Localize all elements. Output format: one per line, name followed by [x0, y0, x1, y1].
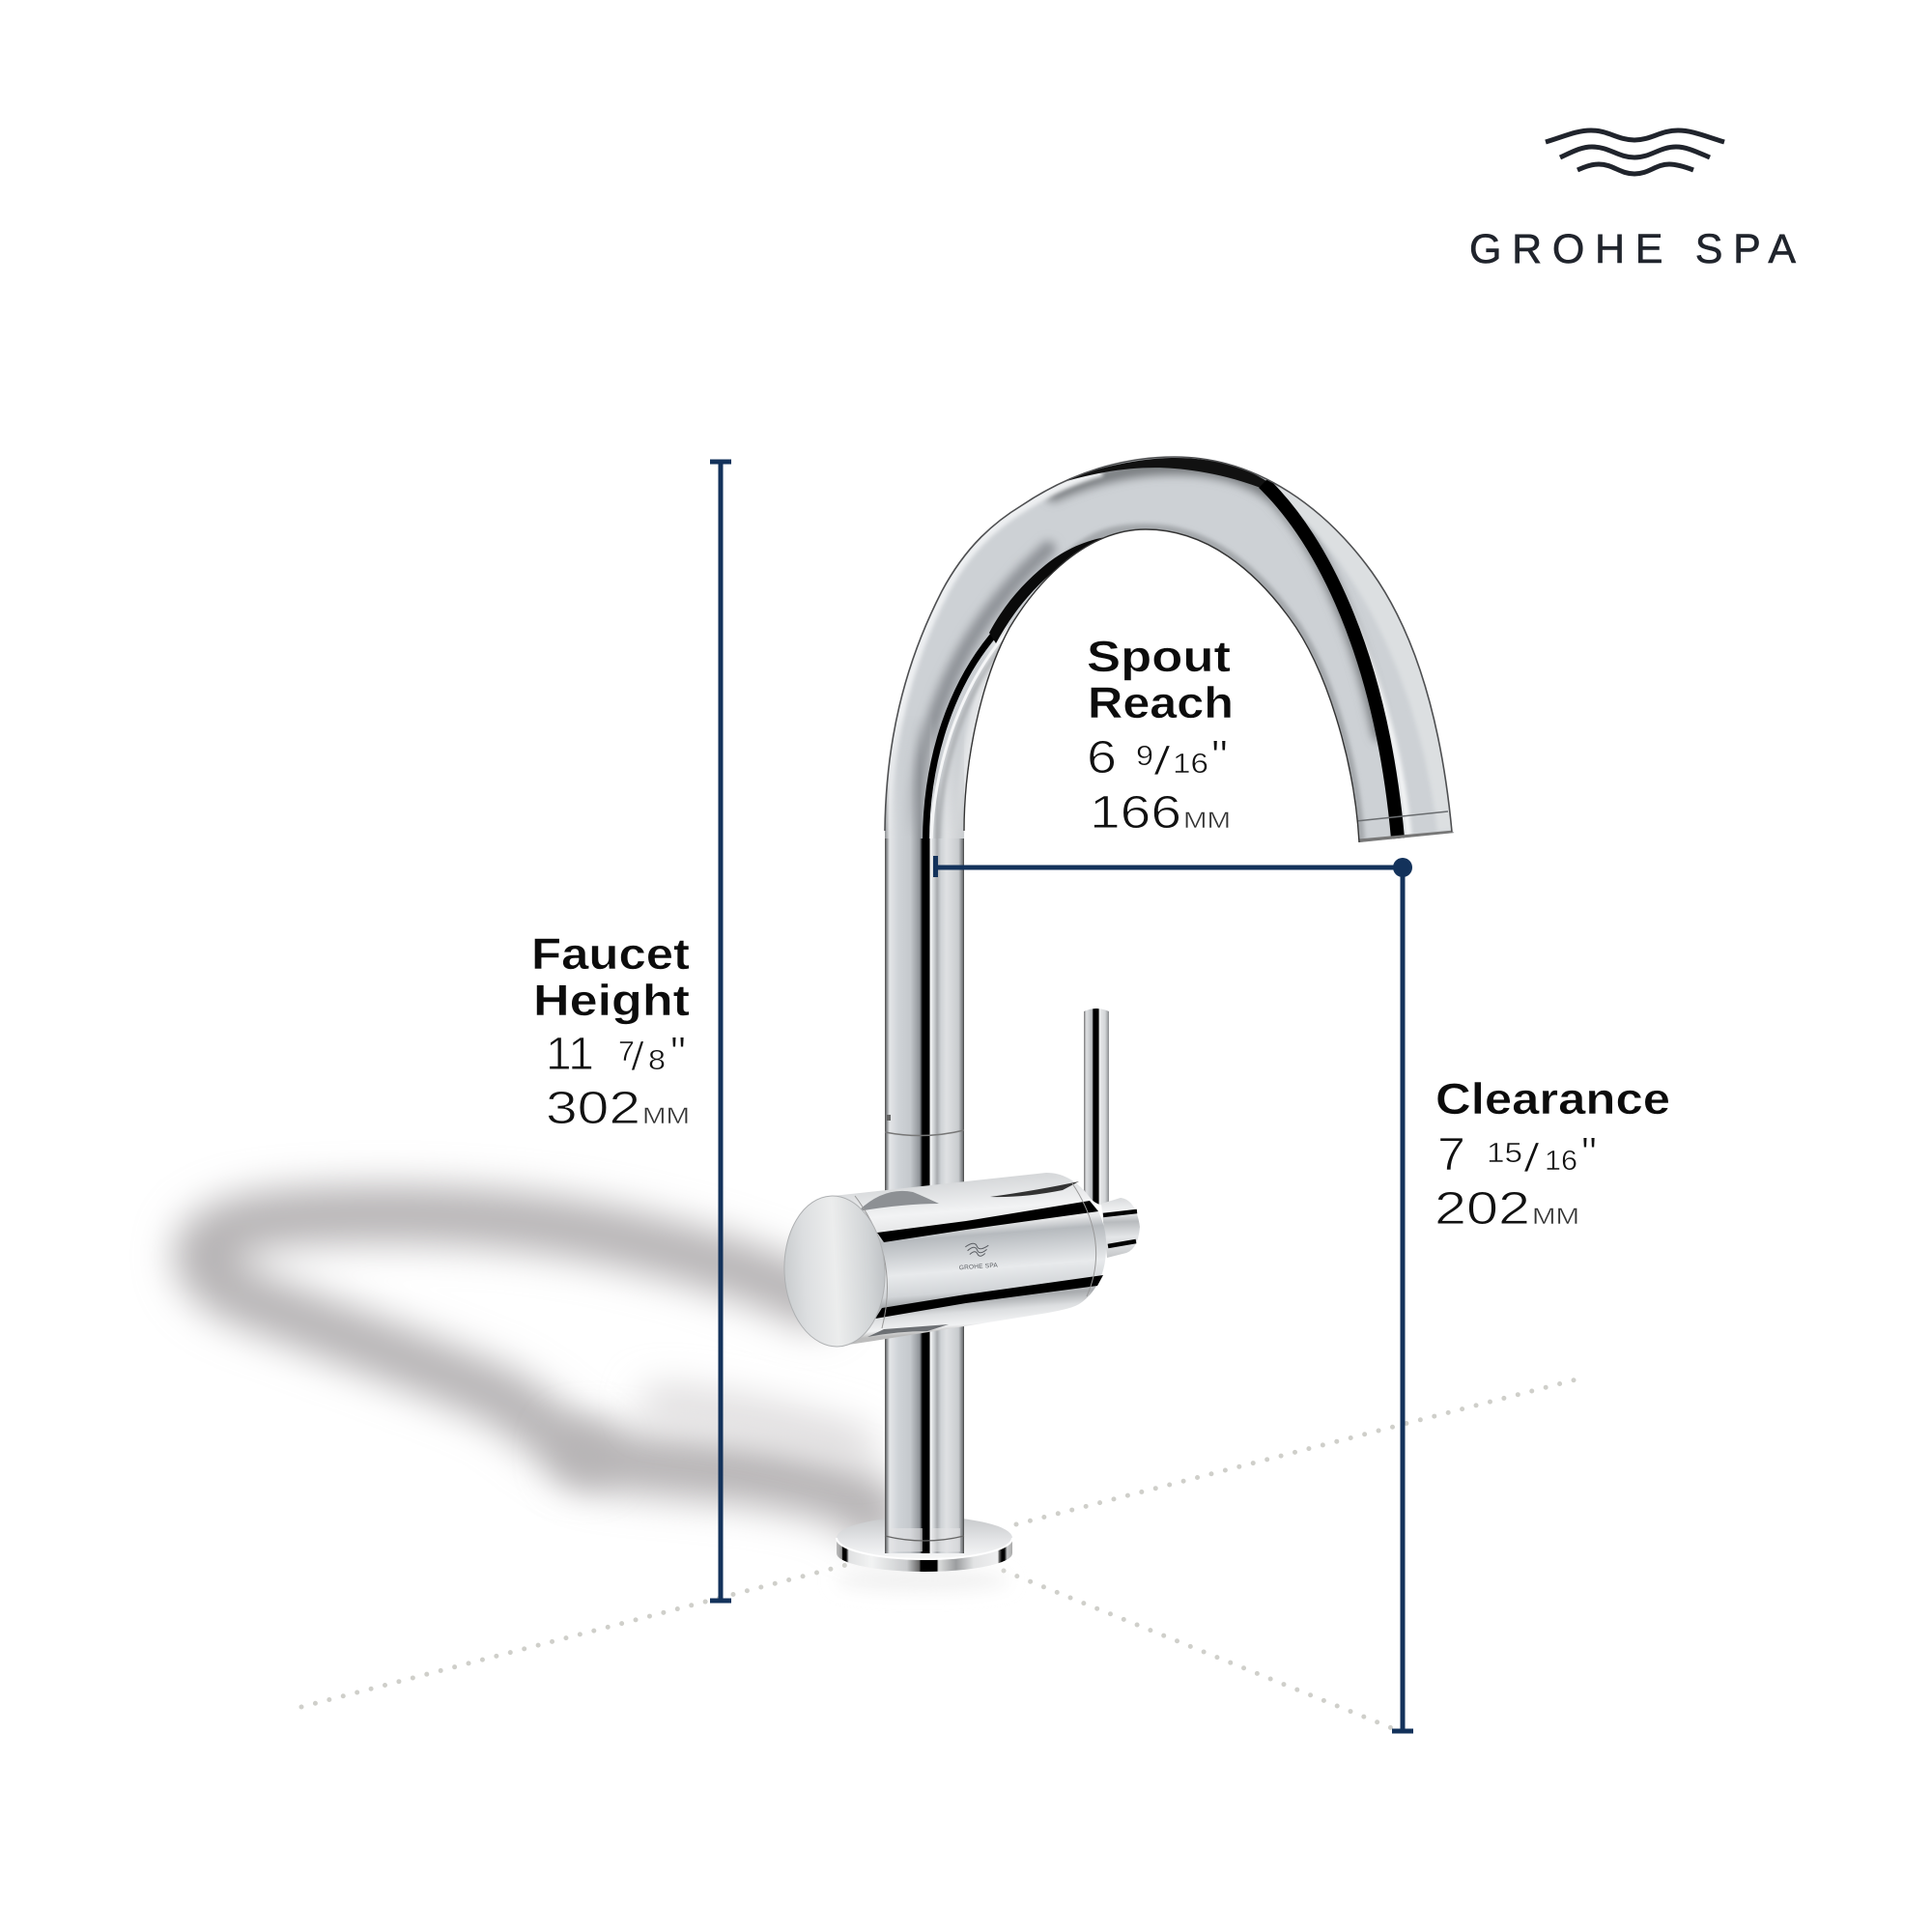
label: clearance: Clearance — [1435, 1074, 1670, 1123]
label: spout reach: Spout — [1087, 632, 1231, 681]
label: clearance: 16 — [1545, 1146, 1577, 1177]
label: clearance: 202 — [1435, 1183, 1530, 1235]
logo: Grohe Spa: GROHE SPA — [1469, 226, 1796, 272]
lever handle — [1084, 1009, 1109, 1205]
label: clearance: 7 — [1437, 1129, 1465, 1180]
dimension: clearance line — [1392, 867, 1413, 1731]
small logo on the body — [957, 1242, 999, 1271]
label: clearance: 15 — [1487, 1138, 1522, 1169]
dimension: spout reach line — [935, 856, 1412, 877]
label: spout reach: 16 — [1173, 749, 1208, 780]
label: clearance — [1435, 1074, 1670, 1235]
label: clearance: " — [1581, 1129, 1597, 1180]
label: faucet height: Height — [533, 976, 690, 1025]
label: clearance: MM — [1532, 1204, 1579, 1230]
label: faucet height: 302 — [546, 1083, 640, 1134]
spout arch — [885, 457, 1455, 845]
label: spout reach: MM — [1183, 808, 1231, 834]
label: faucet height — [531, 929, 690, 1134]
label: spout reach: " — [1211, 732, 1228, 783]
label: clearance: / — [1523, 1135, 1540, 1180]
label: faucet height: MM — [642, 1103, 690, 1129]
label: faucet height: 11 — [546, 1029, 594, 1080]
label: spout reach: Reach — [1088, 678, 1234, 727]
end nub — [1101, 1198, 1140, 1258]
wall shadow of the faucet — [202, 1214, 874, 1515]
label: faucet height: Faucet — [531, 929, 690, 979]
small logo on the body: GROHE SPA — [959, 1263, 999, 1271]
label: faucet height: 7 — [618, 1037, 635, 1067]
upper stem — [885, 838, 964, 1200]
logo: Grohe Spa — [1469, 130, 1796, 272]
label: faucet height: / — [631, 1034, 644, 1079]
label: faucet height: " — [670, 1029, 686, 1080]
faucet — [781, 457, 1455, 1591]
dimension: faucet height line — [710, 460, 731, 1601]
lower stem — [885, 1323, 964, 1553]
label: spout reach: 6 — [1087, 732, 1117, 783]
faucet base plate — [837, 1517, 1012, 1572]
icon: water waves — [1546, 130, 1724, 174]
label: faucet height: 8 — [648, 1045, 666, 1076]
dotted floor lines — [301, 1379, 1577, 1728]
label: spout reach — [1087, 632, 1234, 838]
mixer body — [833, 1173, 1106, 1347]
end cap disc — [781, 1193, 889, 1350]
label: spout reach: 166 — [1090, 787, 1181, 838]
label: spout reach: 9 — [1136, 741, 1153, 772]
base contact shadow — [836, 1570, 1009, 1591]
infographic canvas — [155, 128, 1797, 1733]
label: spout reach: / — [1153, 738, 1172, 783]
